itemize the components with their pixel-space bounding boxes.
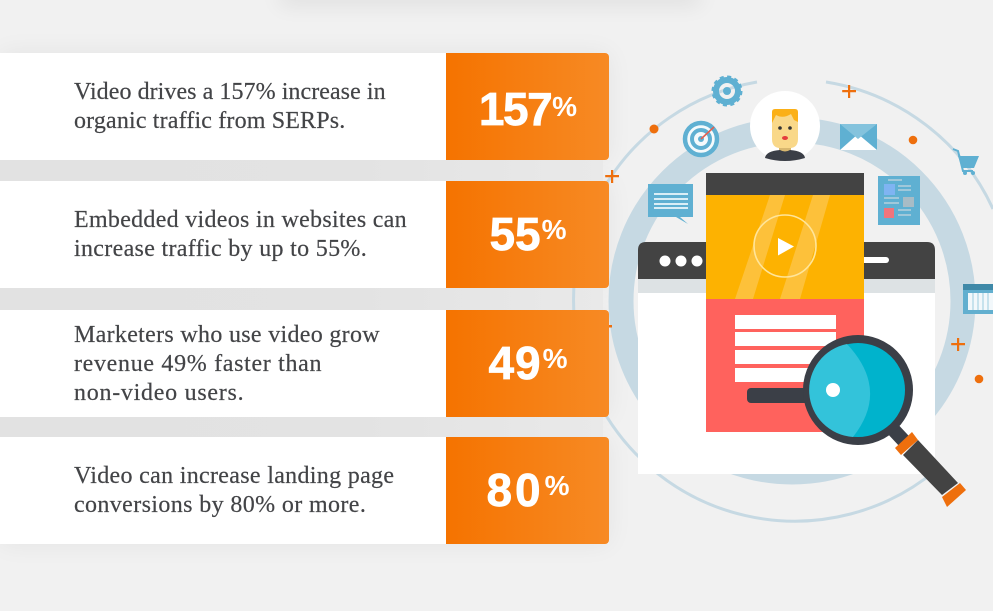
row 3 text: Marketers who use video grow — [74, 322, 380, 348]
video player — [706, 173, 864, 299]
row 2 text: Embedded videos in websites can — [74, 207, 407, 233]
row 4 — [0, 437, 609, 544]
icon: gear — [713, 77, 741, 105]
icon: calendar — [963, 284, 993, 314]
icon: document — [878, 176, 920, 225]
row 1 text: Video drives a 157% increase in — [74, 79, 386, 105]
row 3 text — [74, 322, 380, 406]
magnifying glass — [807, 339, 966, 507]
thick ring — [621, 130, 963, 472]
row 2 text: increase traffic by up to 55%. — [74, 236, 367, 262]
row 4 statistic: 80% — [486, 464, 570, 516]
row 1 statistic: 157% — [479, 83, 577, 135]
row 1 text: organic traffic from SERPs. — [74, 108, 345, 134]
icon: speech bubble — [648, 184, 693, 224]
row shadows — [0, 160, 600, 437]
row 1 — [0, 53, 609, 160]
icon: target — [685, 123, 717, 155]
row 1 text — [74, 79, 386, 134]
icon: cart — [953, 149, 979, 175]
row 2 — [0, 181, 609, 288]
row 3 statistic: 49% — [488, 337, 568, 389]
row 3 — [0, 310, 609, 417]
row 3 text: non-video users. — [74, 380, 244, 406]
row 4 statistic — [446, 437, 609, 544]
row 1 statistic — [446, 53, 609, 160]
browser window — [638, 242, 935, 474]
icon: envelope — [840, 124, 877, 150]
thin orbit arcs — [574, 82, 993, 521]
row 3 statistic — [446, 310, 609, 417]
row 2 statistic — [446, 181, 609, 288]
row 4 text: conversions by 80% or more. — [74, 492, 366, 518]
row 2 text — [74, 207, 407, 262]
row 4 text — [74, 463, 394, 518]
icon: avatar — [750, 91, 820, 161]
row 3 text: revenue 49% faster than — [74, 351, 322, 377]
row 2 statistic: 55% — [489, 208, 567, 260]
landing page form — [706, 299, 864, 432]
decorative orange marks — [605, 85, 983, 383]
row 4 text: Video can increase landing page — [74, 463, 394, 489]
